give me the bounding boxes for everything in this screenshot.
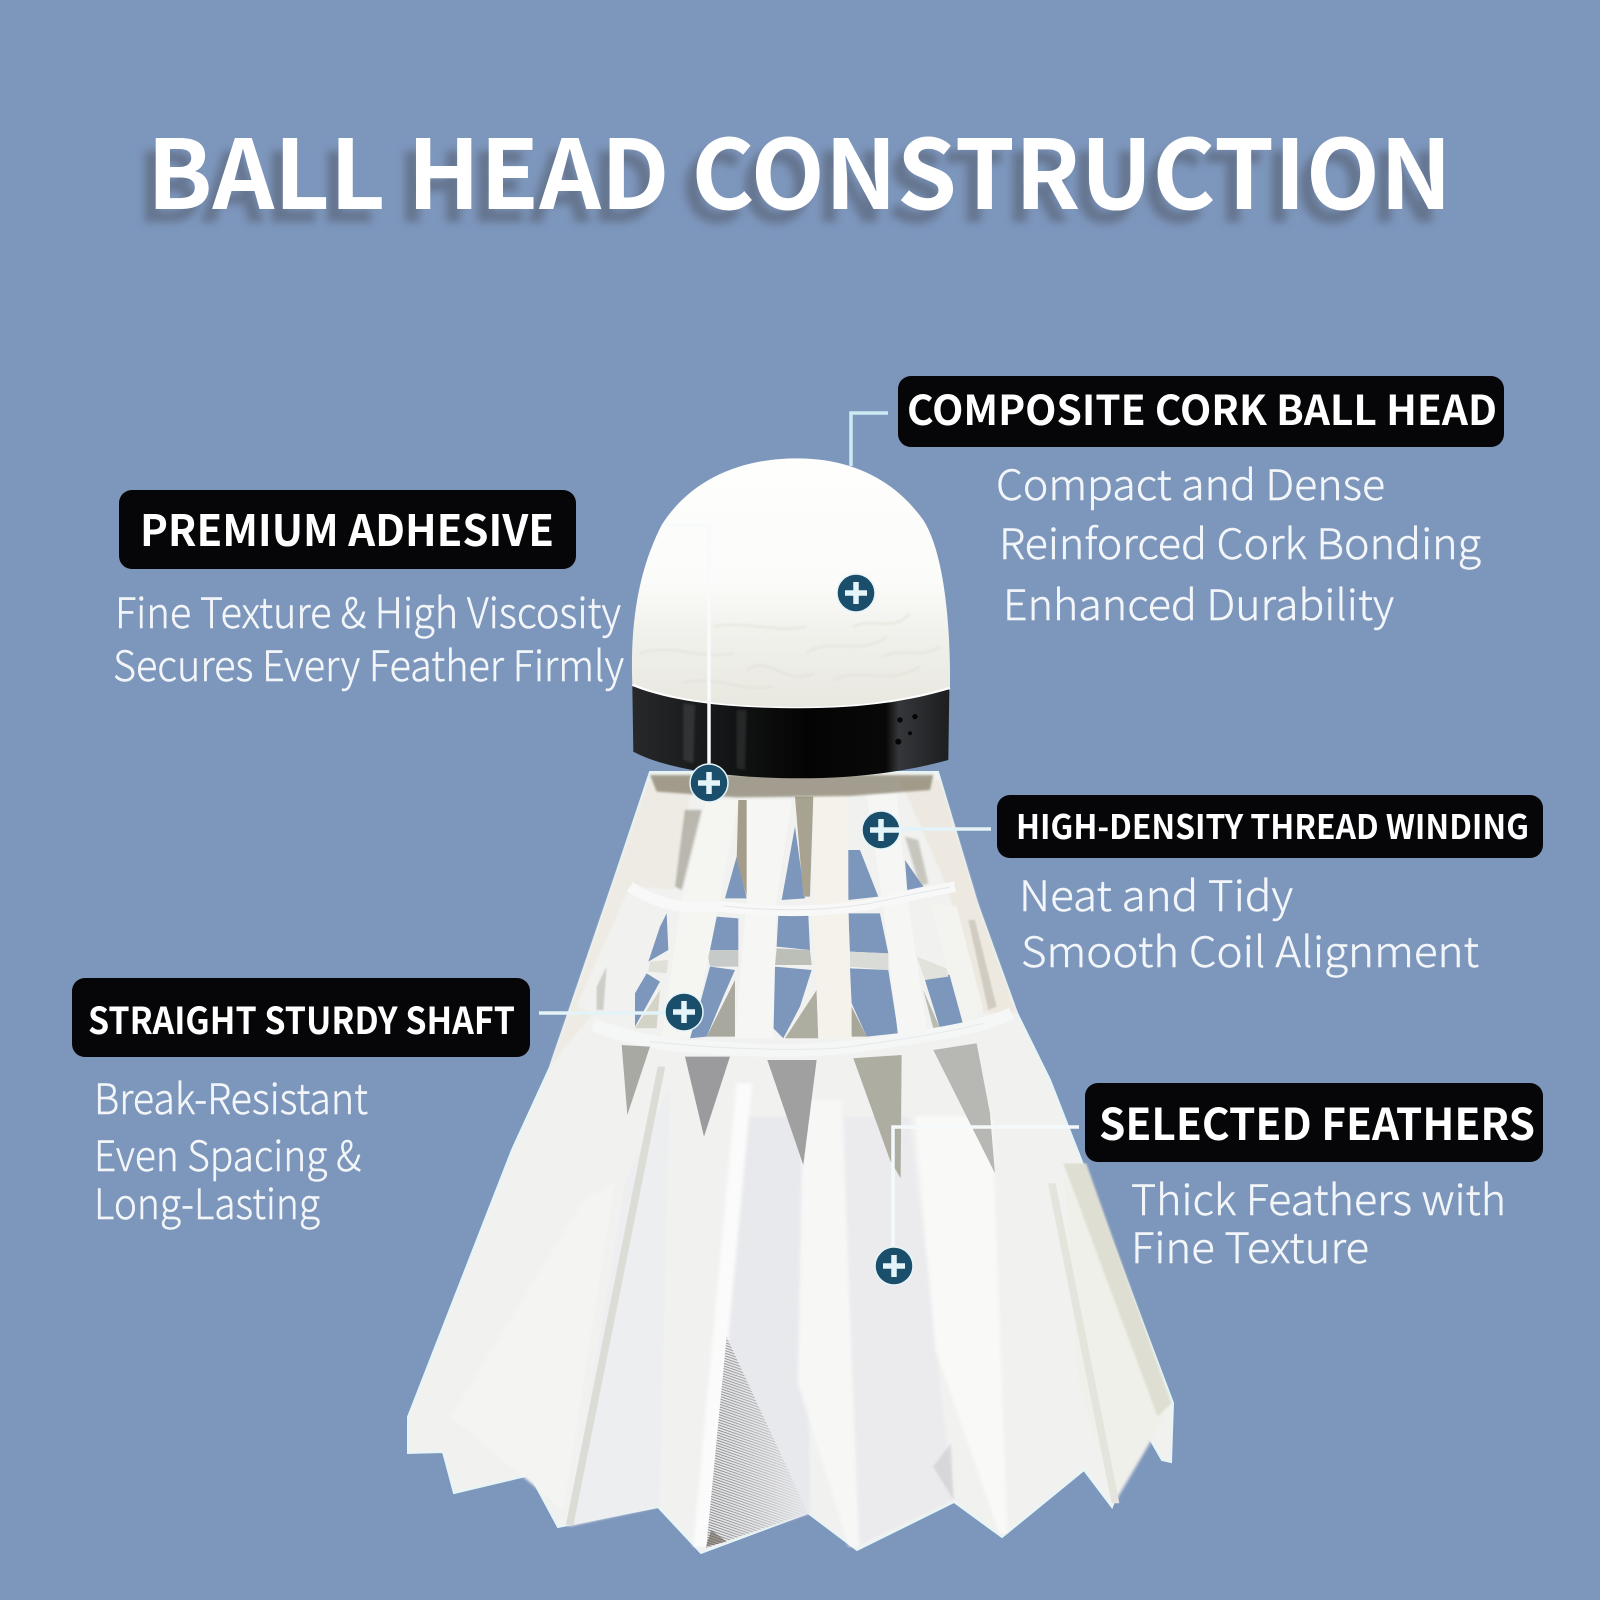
marker bbox=[837, 574, 875, 612]
callout: selected feathers bbox=[875, 1083, 1543, 1285]
description: Smooth Coil Alignment bbox=[1021, 919, 1479, 980]
description: Break-Resistant bbox=[94, 1066, 368, 1127]
label: SELECTED FEATHERS bbox=[1099, 1089, 1535, 1153]
description bbox=[1019, 863, 1479, 980]
gray feather gaps bbox=[622, 1045, 650, 1115]
description: Secures Every Feather Firmly bbox=[113, 633, 624, 694]
brown binding shadow bbox=[650, 775, 933, 797]
description: Long-Lasting bbox=[94, 1171, 320, 1232]
label: COMPOSITE CORK BALL HEAD bbox=[907, 377, 1497, 437]
leader line bbox=[664, 525, 709, 770]
callout: straight sturdy shaft bbox=[72, 978, 703, 1232]
cork ball head bbox=[632, 458, 950, 778]
description: Enhanced Durability bbox=[1003, 572, 1394, 633]
label bbox=[72, 978, 530, 1057]
windows between quills bbox=[635, 827, 963, 1038]
description bbox=[113, 580, 624, 694]
leader line bbox=[893, 1127, 1079, 1250]
marker bbox=[875, 1247, 913, 1285]
description: Even Spacing & bbox=[94, 1123, 361, 1184]
quills bbox=[735, 800, 792, 1038]
label: HIGH-DENSITY THREAD WINDING bbox=[1016, 800, 1529, 849]
label: STRAIGHT STURDY SHAFT bbox=[88, 991, 515, 1045]
marker bbox=[862, 811, 900, 849]
feather skirt bbox=[408, 772, 1173, 1553]
description bbox=[1131, 1167, 1506, 1276]
callout: high-density thread winding bbox=[862, 795, 1543, 980]
description: Thick Feathers with bbox=[1131, 1167, 1506, 1228]
callout: premium adhesive bbox=[113, 490, 728, 802]
leader line bbox=[539, 1011, 665, 1015]
black band bbox=[632, 686, 949, 778]
label: PREMIUM ADHESIVE bbox=[140, 497, 554, 559]
title: BALL HEAD CONSTRUCTION bbox=[147, 98, 1452, 237]
description: Fine Texture & High Viscosity bbox=[115, 580, 621, 641]
marker bbox=[690, 764, 728, 802]
description: Compact and Dense bbox=[996, 452, 1385, 513]
thread winding rings bbox=[630, 887, 955, 911]
description: Neat and Tidy bbox=[1019, 863, 1293, 924]
description: Reinforced Cork Bonding bbox=[999, 511, 1481, 572]
leader line bbox=[851, 413, 888, 466]
cork texture bbox=[640, 613, 940, 688]
shuttlecock illustration bbox=[408, 458, 1173, 1553]
description bbox=[94, 1066, 368, 1232]
upper quills and windows bbox=[550, 775, 1017, 1178]
lower feather panels bbox=[451, 1067, 1171, 1548]
inner quills bbox=[795, 797, 813, 897]
leader line bbox=[880, 827, 991, 831]
description: Fine Texture bbox=[1131, 1215, 1369, 1276]
cork dome bbox=[632, 458, 950, 708]
marker bbox=[665, 993, 703, 1031]
description bbox=[996, 452, 1481, 633]
callout: composite cork ball head bbox=[837, 376, 1504, 633]
